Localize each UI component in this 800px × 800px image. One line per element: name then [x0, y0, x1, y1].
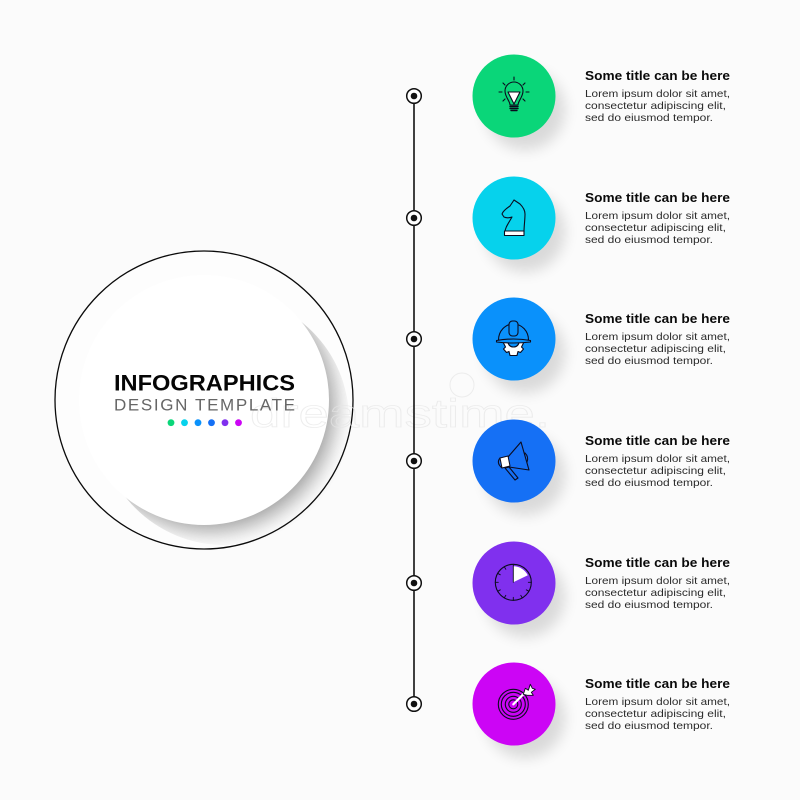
step 5 text: Lorem ipsum dolor sit amet,: [585, 575, 730, 587]
step 1 text: Lorem ipsum dolor sit amet,: [585, 88, 730, 100]
node 1: [407, 89, 421, 103]
cyan disc: [472, 176, 556, 260]
light blue disc: [472, 298, 556, 380]
purple disc: [472, 542, 556, 624]
step 3 text: Lorem ipsum dolor sit amet,: [585, 331, 730, 343]
node 5: [407, 576, 421, 590]
watermark: dreamstime.: [250, 392, 550, 436]
node 6: [407, 697, 421, 711]
blue disc: [472, 420, 556, 502]
magenta disc: [472, 662, 556, 746]
heading: INFOGRAPHICS: [114, 370, 295, 396]
step 5 text: [585, 556, 730, 611]
step 2 text: [585, 191, 730, 246]
panel: central circle: [55, 251, 550, 549]
step 3 text: Some title can be here: [585, 312, 730, 326]
icon: light bulb: [499, 77, 529, 110]
step 2 text: Some title can be here: [585, 191, 730, 205]
step 3 text: [585, 312, 730, 367]
step 6 text: Lorem ipsum dolor sit amet,: [585, 696, 730, 708]
step 6 text: Some title can be here: [585, 677, 730, 691]
step 1 text: sed do eiusmod tempor.: [585, 112, 713, 124]
step 3 text: sed do eiusmod tempor.: [585, 355, 713, 367]
step 6 text: sed do eiusmod tempor.: [585, 720, 713, 732]
step 3 text: consectetur adipiscing elit,: [585, 343, 726, 355]
colour dots: [168, 419, 242, 426]
crescent shadow: [126, 322, 348, 544]
step 4 text: consectetur adipiscing elit,: [585, 465, 726, 477]
step 4: [472, 420, 565, 515]
step 4 text: Some title can be here: [585, 434, 730, 448]
step 4 text: sed do eiusmod tempor.: [585, 477, 713, 489]
step 4 text: Lorem ipsum dolor sit amet,: [585, 453, 730, 465]
step 1 text: Some title can be here: [585, 69, 730, 83]
disc shadow: [485, 70, 565, 150]
icon: clock timer: [495, 564, 531, 600]
step 6: [472, 662, 565, 758]
green disc: [472, 54, 556, 138]
step 3: [472, 298, 565, 393]
icon: chess knight: [502, 200, 525, 236]
step 6 text: [585, 677, 730, 732]
watermark: [250, 373, 550, 436]
disc shadow: [485, 557, 565, 637]
icon: megaphone: [498, 442, 529, 480]
step 1 text: [585, 69, 730, 124]
disc shadow: [485, 192, 565, 272]
node 2: [407, 211, 421, 225]
step 2 text: consectetur adipiscing elit,: [585, 222, 726, 234]
node 3: [407, 332, 421, 346]
step 5 text: consectetur adipiscing elit,: [585, 587, 726, 599]
disc shadow: [485, 313, 565, 393]
step 5 text: Some title can be here: [585, 556, 730, 570]
outer ring: [55, 251, 353, 549]
node 4: [407, 454, 421, 468]
step 5 text: sed do eiusmod tempor.: [585, 599, 713, 611]
icon: helmet and gear: [496, 321, 530, 356]
subheading: DESIGN TEMPLATE: [114, 396, 295, 414]
icon: target with arrow: [498, 684, 535, 719]
step 2 text: sed do eiusmod tempor.: [585, 234, 713, 246]
timeline: [407, 89, 421, 711]
step 1 text: consectetur adipiscing elit,: [585, 100, 726, 112]
disc shadow: [485, 435, 565, 515]
step 6 text: consectetur adipiscing elit,: [585, 708, 726, 720]
step 2 text: Lorem ipsum dolor sit amet,: [585, 210, 730, 222]
inner white disc: [79, 275, 329, 525]
disc shadow: [485, 678, 565, 758]
step 2: [472, 176, 565, 272]
step 4 text: [585, 434, 730, 489]
step 1: [472, 54, 565, 150]
step 5: [472, 542, 565, 637]
